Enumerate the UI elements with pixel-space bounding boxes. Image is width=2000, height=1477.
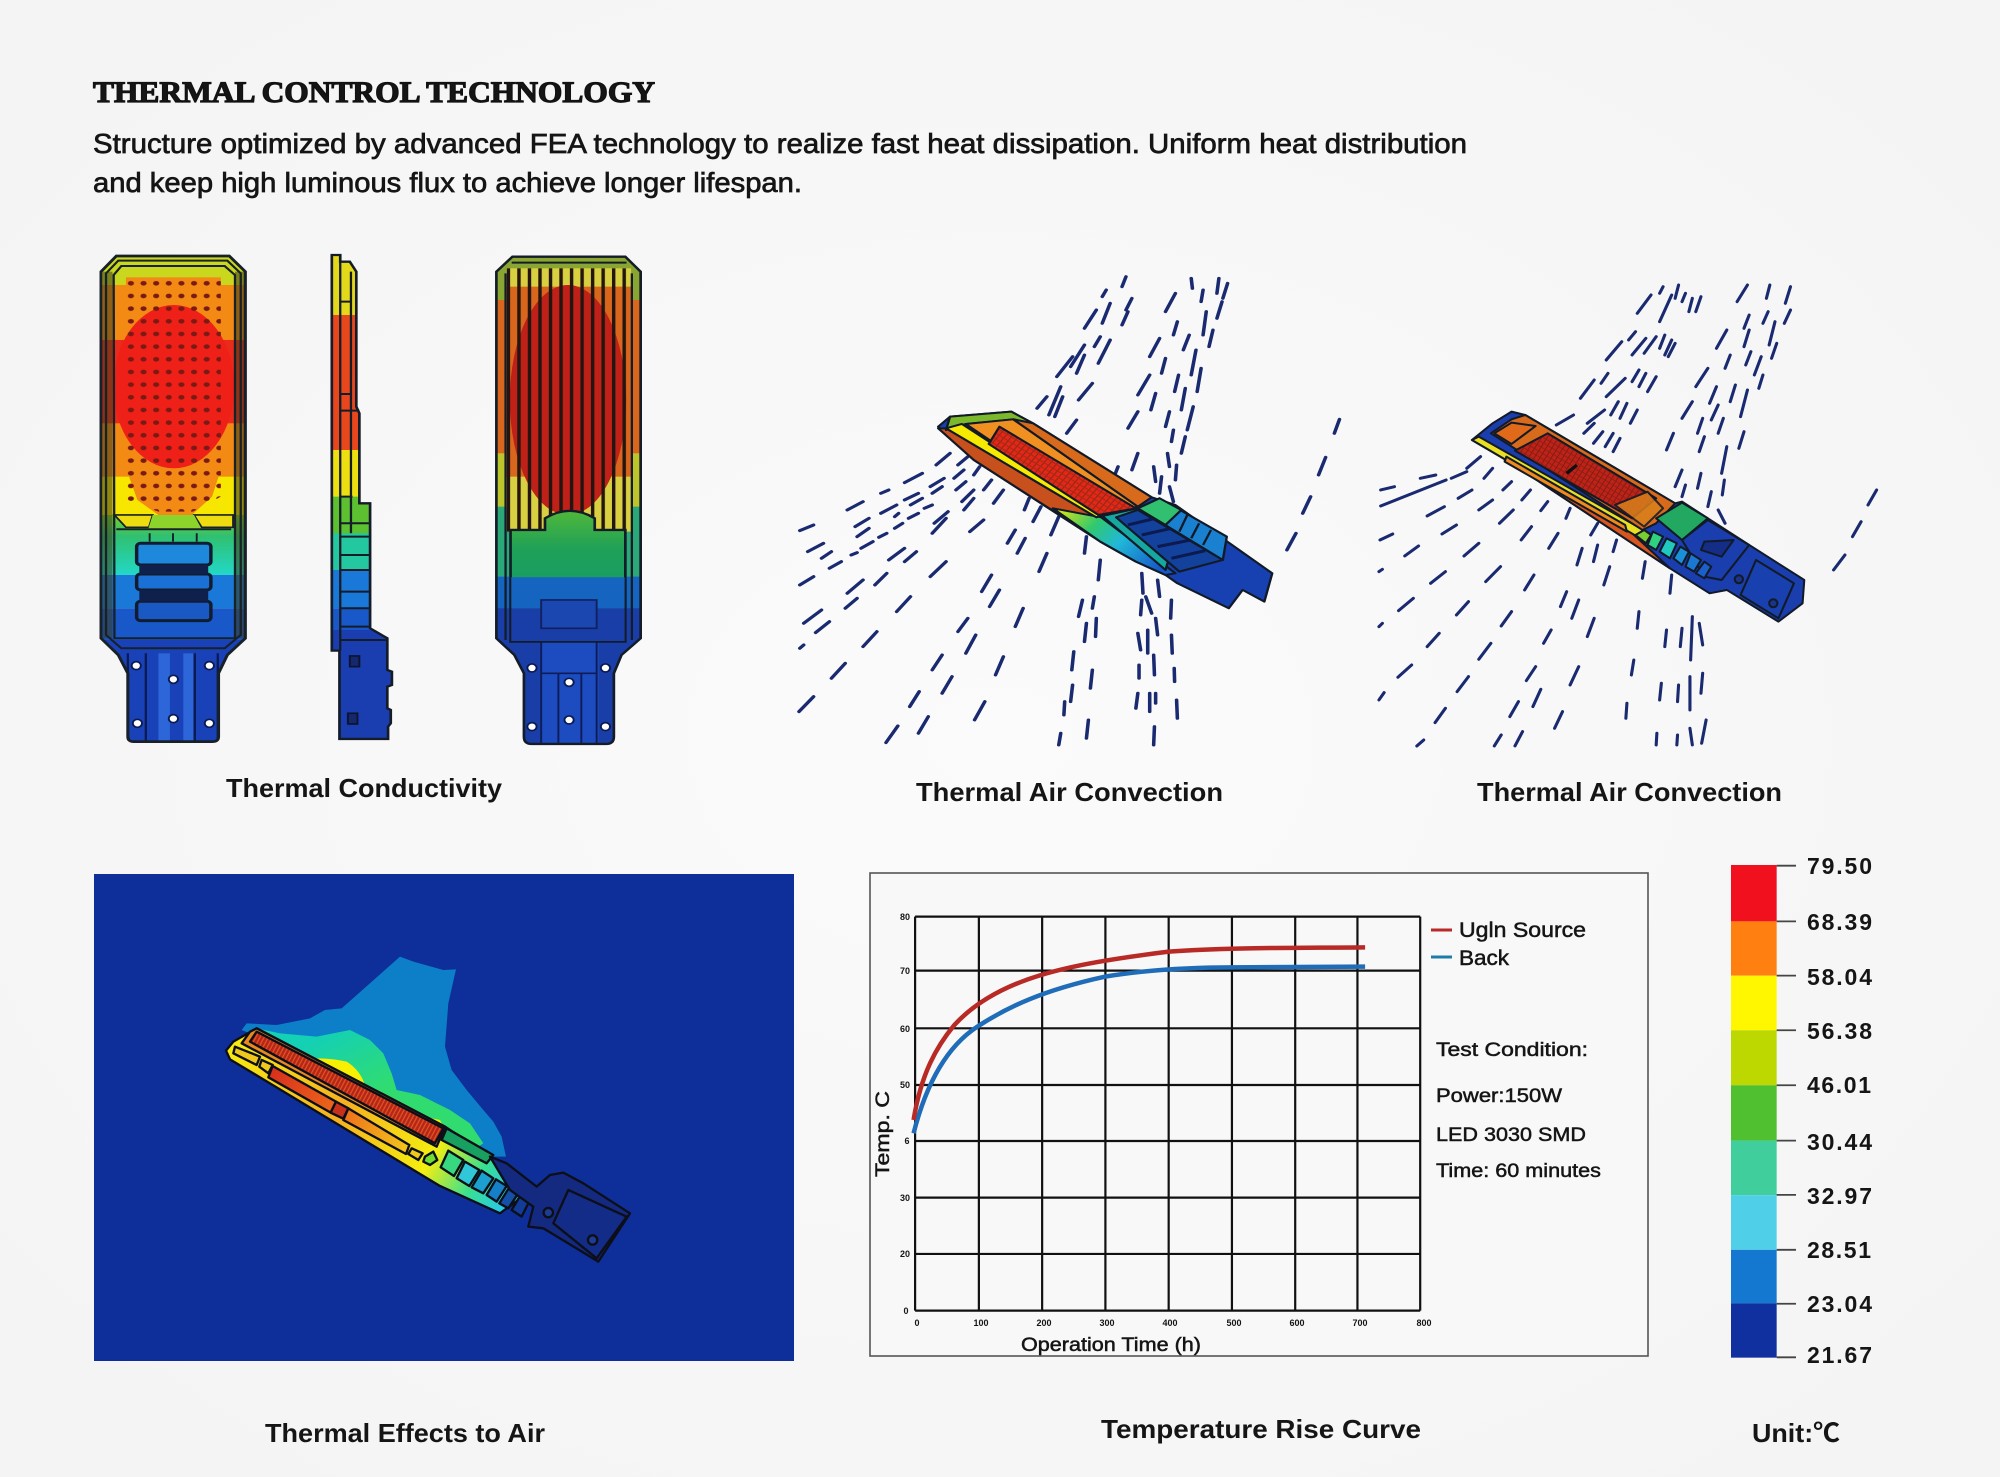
- scale values: 46.01: [1807, 1072, 1871, 1098]
- intro text: [93, 128, 1467, 198]
- y axis ticks: 80: [900, 912, 910, 922]
- x axis ticks: [914, 1318, 1432, 1328]
- scale values: 32.97: [1807, 1183, 1872, 1209]
- unit label: Unit:℃: [1752, 1418, 1840, 1448]
- x axis title: Operation Time (h): [1021, 1335, 1201, 1356]
- panel: air convection simulation 1: [799, 277, 1339, 745]
- color scale legend: [1731, 853, 1872, 1368]
- legend: Ugln Source: [1459, 919, 1586, 942]
- intro text: and keep high luminous flux to achieve longer lifespan.: [93, 167, 802, 198]
- caption: thermal conductivity: Thermal Conductivity: [226, 773, 503, 803]
- simulated lamp: [1472, 412, 1804, 622]
- panel: thermal conductivity lamp views: [95, 253, 644, 745]
- test condition notes: Test Condition:: [1436, 1039, 1588, 1061]
- hot air pockets: [317, 1058, 445, 1143]
- lamp rear view: [493, 253, 644, 745]
- x axis ticks: 300: [1099, 1318, 1115, 1328]
- caption: thermal air convection 1: Thermal Air Convection: [916, 777, 1223, 807]
- y axis ticks: 30: [900, 1193, 910, 1203]
- y axis ticks: 6: [904, 1136, 910, 1146]
- chart frame: [870, 873, 1648, 1356]
- intro text: Structure optimized by advanced FEA technology to realize fast heat dissipation. Uniform heat distribution: [93, 128, 1467, 159]
- y axis ticks: 50: [900, 1080, 910, 1090]
- x axis ticks: 0: [914, 1318, 920, 1328]
- legend: [1431, 919, 1586, 970]
- x axis ticks: 500: [1226, 1318, 1242, 1328]
- x axis ticks: 400: [1162, 1318, 1178, 1328]
- x axis ticks: 800: [1416, 1318, 1432, 1328]
- scale values: [1807, 853, 1872, 1368]
- y axis title: Temp. C: [873, 1091, 894, 1177]
- y axis ticks: 70: [900, 966, 910, 976]
- scale values: 30.44: [1807, 1129, 1872, 1155]
- plot lines: [914, 917, 1420, 1311]
- simulated lamp section view: [226, 1028, 630, 1262]
- heat plume: [242, 957, 506, 1157]
- test condition notes: [1436, 1039, 1601, 1182]
- simulated lamp: [938, 412, 1272, 608]
- x axis ticks: 600: [1289, 1318, 1305, 1328]
- test condition notes: Power:150W: [1436, 1085, 1563, 1107]
- test condition notes: LED 3030 SMD: [1436, 1124, 1586, 1146]
- scale values: 21.67: [1807, 1342, 1872, 1368]
- scale values: 79.50: [1807, 853, 1872, 879]
- title: THERMAL CONTROL TECHNOLOGY: [93, 76, 655, 109]
- scale values: 58.04: [1807, 964, 1872, 990]
- scale values: 56.38: [1807, 1018, 1872, 1044]
- caption: temperature rise curve: Temperature Rise Curve: [1101, 1414, 1421, 1444]
- color bands: [1731, 865, 1796, 1358]
- scale values: 68.39: [1807, 909, 1872, 935]
- warm air band: [257, 1028, 483, 1150]
- scale values: 28.51: [1807, 1237, 1871, 1263]
- lamp front view: [95, 253, 252, 743]
- y axis ticks: [900, 912, 910, 1316]
- air flow dashes: [1379, 285, 1877, 746]
- y axis ticks: 0: [903, 1306, 909, 1316]
- chart: temperature rise curve: [870, 873, 1648, 1356]
- y axis ticks: 60: [900, 1024, 910, 1034]
- x axis ticks: 700: [1352, 1318, 1368, 1328]
- legend: Back: [1459, 947, 1510, 970]
- panel: thermal effects to air: [94, 874, 794, 1361]
- x axis ticks: 100: [973, 1318, 989, 1328]
- y axis ticks: 20: [900, 1249, 910, 1259]
- caption: thermal air convection 2: Thermal Air Convection: [1477, 777, 1782, 807]
- scale values: 23.04: [1807, 1291, 1872, 1317]
- panel: air convection simulation 2: [1379, 285, 1877, 746]
- x axis ticks: 200: [1036, 1318, 1052, 1328]
- lamp side view: [329, 253, 398, 743]
- air flow dashes: [799, 277, 1339, 745]
- caption: thermal effects to air: Thermal Effects to Air: [265, 1418, 545, 1448]
- test condition notes: Time: 60 minutes: [1436, 1160, 1601, 1182]
